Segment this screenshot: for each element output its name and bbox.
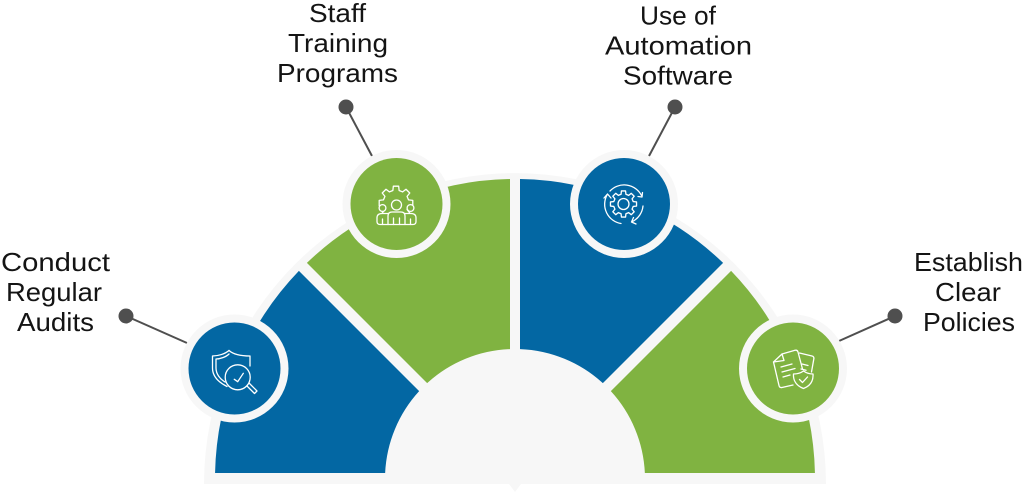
connector: Staff Training Programs	[338, 100, 372, 156]
label: Use of Automation Software	[605, 0, 752, 90]
segment: left blue	[215, 271, 419, 473]
badge: staff training gear and people	[342, 150, 450, 258]
connector: Establish Clear Policies	[839, 308, 902, 341]
connector: Conduct Regular Audits	[118, 308, 187, 343]
segment: upper right blue	[520, 179, 723, 383]
semicircle backing halo	[204, 173, 826, 492]
label: Conduct Regular Audits: Regular	[6, 277, 102, 307]
segment: upper left green	[307, 179, 510, 383]
label: Conduct Regular Audits	[1, 247, 111, 337]
label: Staff Training Programs	[277, 0, 398, 88]
label: Staff Training Programs: Programs	[277, 58, 398, 88]
label: Use of Automation Software: Automation	[605, 30, 752, 60]
badge: audits shield and magnifier	[180, 314, 288, 422]
segment: right green	[611, 271, 815, 473]
label: Conduct Regular Audits: Audits	[17, 307, 94, 337]
label: Use of Automation Software: Software	[623, 60, 733, 90]
label: Establish Clear Policies: Establish	[914, 247, 1023, 277]
label: Use of Automation Software: Use of	[640, 0, 717, 30]
label: Staff Training Programs: Training	[288, 28, 388, 58]
badge: automation gear with cycle arrows	[570, 150, 678, 258]
label: Conduct Regular Audits: Conduct	[1, 247, 111, 277]
label: Establish Clear Policies: Clear	[935, 277, 1001, 307]
label: Establish Clear Policies	[914, 247, 1023, 337]
connector: Use of Automation Software	[649, 100, 682, 156]
label: Establish Clear Policies: Policies	[923, 307, 1015, 337]
badge: policies documents and shield	[739, 314, 847, 422]
